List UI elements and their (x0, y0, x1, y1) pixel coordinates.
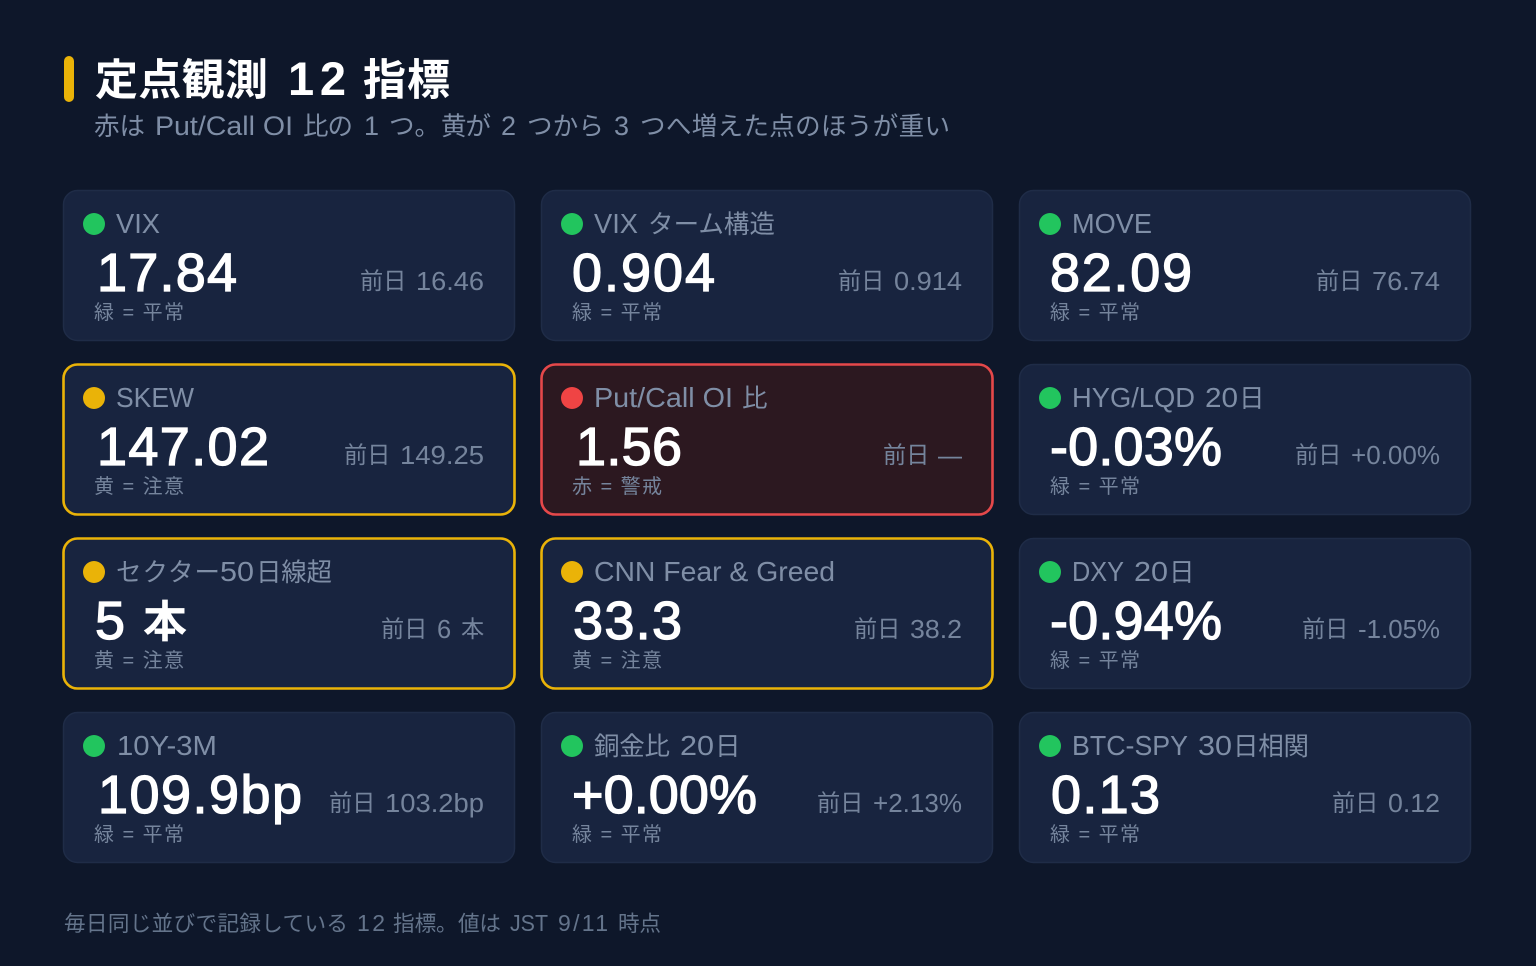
panel: Put/Call OI ratio: 赤 = 警戒 (572, 475, 662, 498)
panel: sectors above 50 day line: 5 (95, 591, 125, 651)
panel: copper gold ratio 20 day: 緑 = 平常 (572, 823, 662, 846)
panel: 10Y-3M: 前日 (329, 790, 375, 816)
panel: copper gold ratio 20 day: +2.13% (873, 790, 962, 818)
panel: SKEW: 149.25 (400, 442, 484, 470)
panel: VIX term structure: ターム構造 (648, 211, 775, 239)
panel: 10Y-3M: 103.2bp (385, 790, 484, 818)
panel: Put/Call OI ratio: 前日 (883, 442, 929, 468)
panel: sectors above 50 day line: セクター (116, 559, 220, 587)
panel: VIX: 緑 = 平常 (94, 301, 184, 324)
subtitle: 黄が (441, 113, 491, 141)
panel: copper gold ratio 20 day: 前日 (817, 790, 863, 816)
footer note: 。 (436, 911, 458, 936)
subtitle: 比の (303, 113, 353, 141)
footer note: 毎日同じ並びで記録している (64, 911, 348, 936)
panel: HYG/LQD 20 day: 20 (1205, 382, 1238, 413)
subtitle: 2 (501, 111, 516, 141)
panel: MOVE: 前日 (1316, 268, 1362, 294)
panel: VIX term structure: 0.914 (894, 268, 962, 296)
title accent bar (64, 56, 74, 102)
footer note: 12 (357, 910, 385, 936)
panel: Put/Call OI ratio: Put/Call OI (594, 382, 733, 413)
panel: BTC-SPY 30 day correlation: 日相関 (1233, 733, 1309, 761)
panel: SKEW (64, 364, 514, 514)
panel: Put/Call OI ratio (542, 364, 992, 514)
panel: MOVE: 緑 = 平常 (1050, 301, 1140, 324)
panel: VIX: VIX (116, 208, 160, 239)
panel: VIX: 17.84 (97, 243, 237, 303)
panel: copper gold ratio 20 day (542, 712, 992, 862)
panel: CNN Fear & Greed (542, 538, 992, 688)
panel: VIX: 16.46 (416, 268, 484, 296)
panel: 10Y-3M: 緑 = 平常 (94, 823, 184, 846)
panel: 10Y-3M (64, 712, 514, 862)
panel: BTC-SPY 30 day correlation: 0.12 (1388, 790, 1440, 818)
subtitle: 1 (364, 111, 379, 141)
panel: DXY 20 day: DXY (1072, 556, 1124, 587)
panel: MOVE: MOVE (1072, 208, 1152, 239)
panel: VIX term structure: 緑 = 平常 (572, 301, 662, 324)
panel: BTC-SPY 30 day correlation: BTC-SPY (1072, 730, 1188, 761)
panel: DXY 20 day: 前日 (1302, 616, 1348, 642)
panel: VIX: 前日 (360, 268, 406, 294)
panel: CNN Fear & Greed: 38.2 (910, 616, 962, 644)
subtitle: 赤は (94, 113, 145, 141)
title: 定点観測 (95, 57, 268, 105)
footer note: 指標 (393, 911, 436, 936)
panel: sectors above 50 day line: 前日 (381, 616, 427, 642)
panel: sectors above 50 day line: 日線超 (256, 559, 332, 587)
panel: VIX term structure: 前日 (838, 268, 884, 294)
footer note: 時点 (618, 911, 661, 936)
subtitle: つから (527, 113, 604, 141)
panel: sectors above 50 day line: 6 (437, 616, 451, 644)
panel: DXY 20 day: 日 (1169, 559, 1195, 587)
panel: VIX term structure: 0.904 (572, 243, 715, 303)
panel: sectors above 50 day line: 50 (220, 556, 254, 587)
panel: copper gold ratio 20 day: +0.00% (572, 765, 757, 825)
panel: HYG/LQD 20 day: 前日 (1295, 442, 1341, 468)
panel: HYG/LQD 20 day: +0.00% (1351, 442, 1440, 470)
panel: 10Y-3M: 10Y-3M (117, 730, 217, 761)
title: 12 (288, 52, 346, 105)
panel: HYG/LQD 20 day: 緑 = 平常 (1050, 475, 1140, 498)
panel: DXY 20 day (1020, 538, 1470, 688)
panel: BTC-SPY 30 day correlation: 0.13 (1051, 765, 1160, 825)
panel: DXY 20 day: -1.05% (1358, 616, 1440, 644)
title (95, 52, 450, 105)
panel: VIX term structure: VIX (594, 208, 638, 239)
footer note: 9/11 (558, 910, 608, 936)
panel: SKEW: SKEW (116, 382, 194, 413)
panel: BTC-SPY 30 day correlation: 前日 (1332, 790, 1378, 816)
panel: CNN Fear & Greed: CNN Fear & Greed (594, 556, 835, 587)
panel: Put/Call OI ratio: 1.56 (576, 417, 682, 477)
panel: MOVE (1020, 190, 1470, 340)
panel: BTC-SPY 30 day correlation (1020, 712, 1470, 862)
panel: HYG/LQD 20 day: -0.03% (1050, 417, 1222, 477)
panel: MOVE: 82.09 (1050, 243, 1192, 303)
subtitle (94, 111, 950, 141)
panel: Put/Call OI ratio: 比 (742, 385, 768, 413)
panel: DXY 20 day: 緑 = 平常 (1050, 649, 1140, 672)
panel: Put/Call OI ratio: — (938, 442, 962, 470)
panel: sectors above 50 day line: 黄 = 注意 (94, 649, 184, 672)
panel: DXY 20 day: 20 (1134, 556, 1168, 587)
panel: DXY 20 day: -0.94% (1050, 591, 1222, 651)
panel: BTC-SPY 30 day correlation: 30 (1198, 730, 1232, 761)
panel: sectors above 50 day line: 本 (143, 598, 187, 647)
footer note: 値は (458, 911, 501, 936)
footer note: JST (510, 910, 548, 936)
panel: 10Y-3M: 109.9bp (98, 765, 302, 825)
panel: BTC-SPY 30 day correlation: 緑 = 平常 (1050, 823, 1140, 846)
panel: HYG/LQD 20 day (1020, 364, 1470, 514)
panel: VIX term structure (542, 190, 992, 340)
panel: copper gold ratio 20 day: 日 (715, 733, 741, 761)
panel: sectors above 50 day line (64, 538, 514, 688)
panel: SKEW: 147.02 (97, 417, 269, 477)
panel: HYG/LQD 20 day: 日 (1239, 385, 1265, 413)
panel: SKEW: 前日 (344, 442, 390, 468)
subtitle: つ。 (389, 113, 440, 141)
panel: copper gold ratio 20 day: 20 (680, 730, 714, 761)
panel: CNN Fear & Greed: 前日 (854, 616, 900, 642)
panel: SKEW: 黄 = 注意 (94, 475, 184, 498)
panel: MOVE: 76.74 (1372, 268, 1440, 296)
footer note (64, 910, 661, 936)
subtitle: 3 (614, 111, 629, 141)
panel: VIX (64, 190, 514, 340)
panel: sectors above 50 day line: 本 (461, 616, 484, 642)
subtitle: つへ増えた点のほうが重い (640, 113, 950, 141)
panel: CNN Fear & Greed: 黄 = 注意 (572, 649, 662, 672)
subtitle: Put/Call OI (155, 111, 293, 141)
title: 指標 (363, 57, 450, 105)
panel: CNN Fear & Greed: 33.3 (573, 591, 682, 651)
panel: copper gold ratio 20 day: 銅金比 (594, 733, 670, 761)
panel: HYG/LQD 20 day: HYG/LQD (1072, 382, 1195, 413)
